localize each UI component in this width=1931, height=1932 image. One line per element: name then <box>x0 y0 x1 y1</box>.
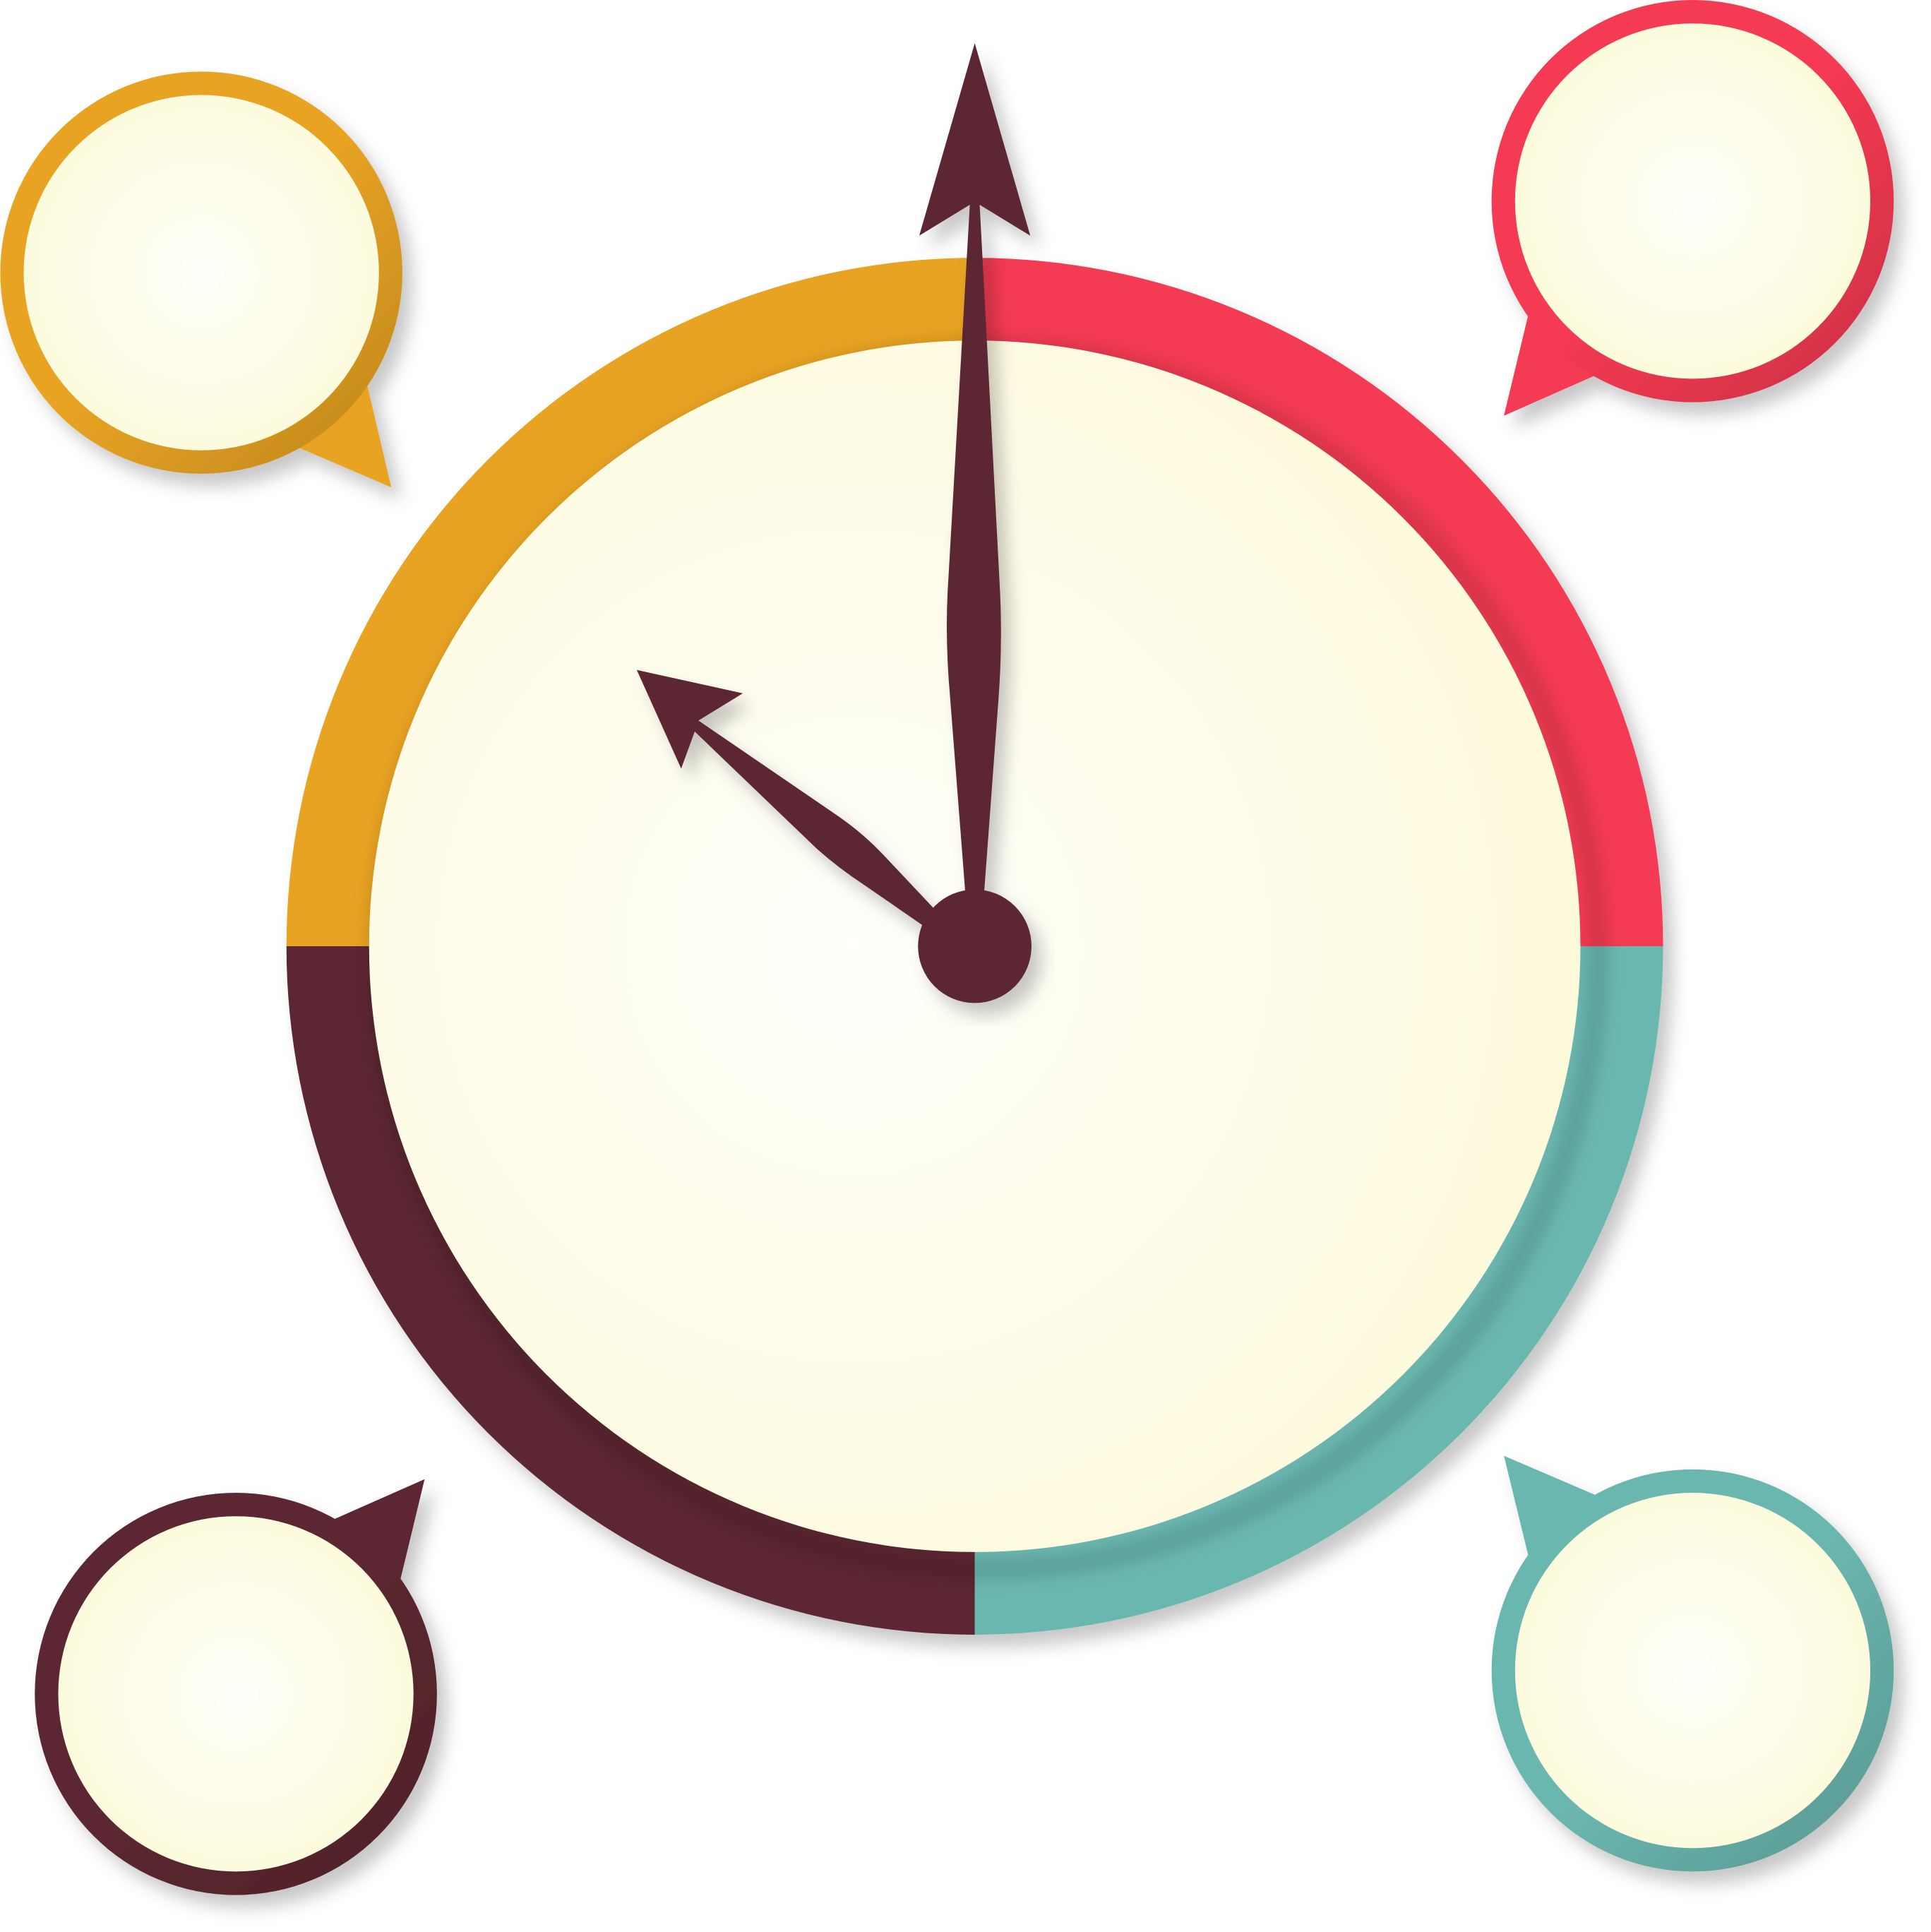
bubble: bottom-left maroon <box>35 1479 437 1895</box>
bubble: top-right red <box>1492 0 1894 416</box>
minute hand <box>919 43 1030 919</box>
bubble: bottom-right teal <box>1492 1456 1894 1871</box>
hub <box>918 890 1032 1003</box>
clock face <box>369 340 1580 1552</box>
bubble: top-left orange <box>0 71 402 487</box>
clock ring <box>287 258 1663 1635</box>
hour hand <box>637 670 944 931</box>
